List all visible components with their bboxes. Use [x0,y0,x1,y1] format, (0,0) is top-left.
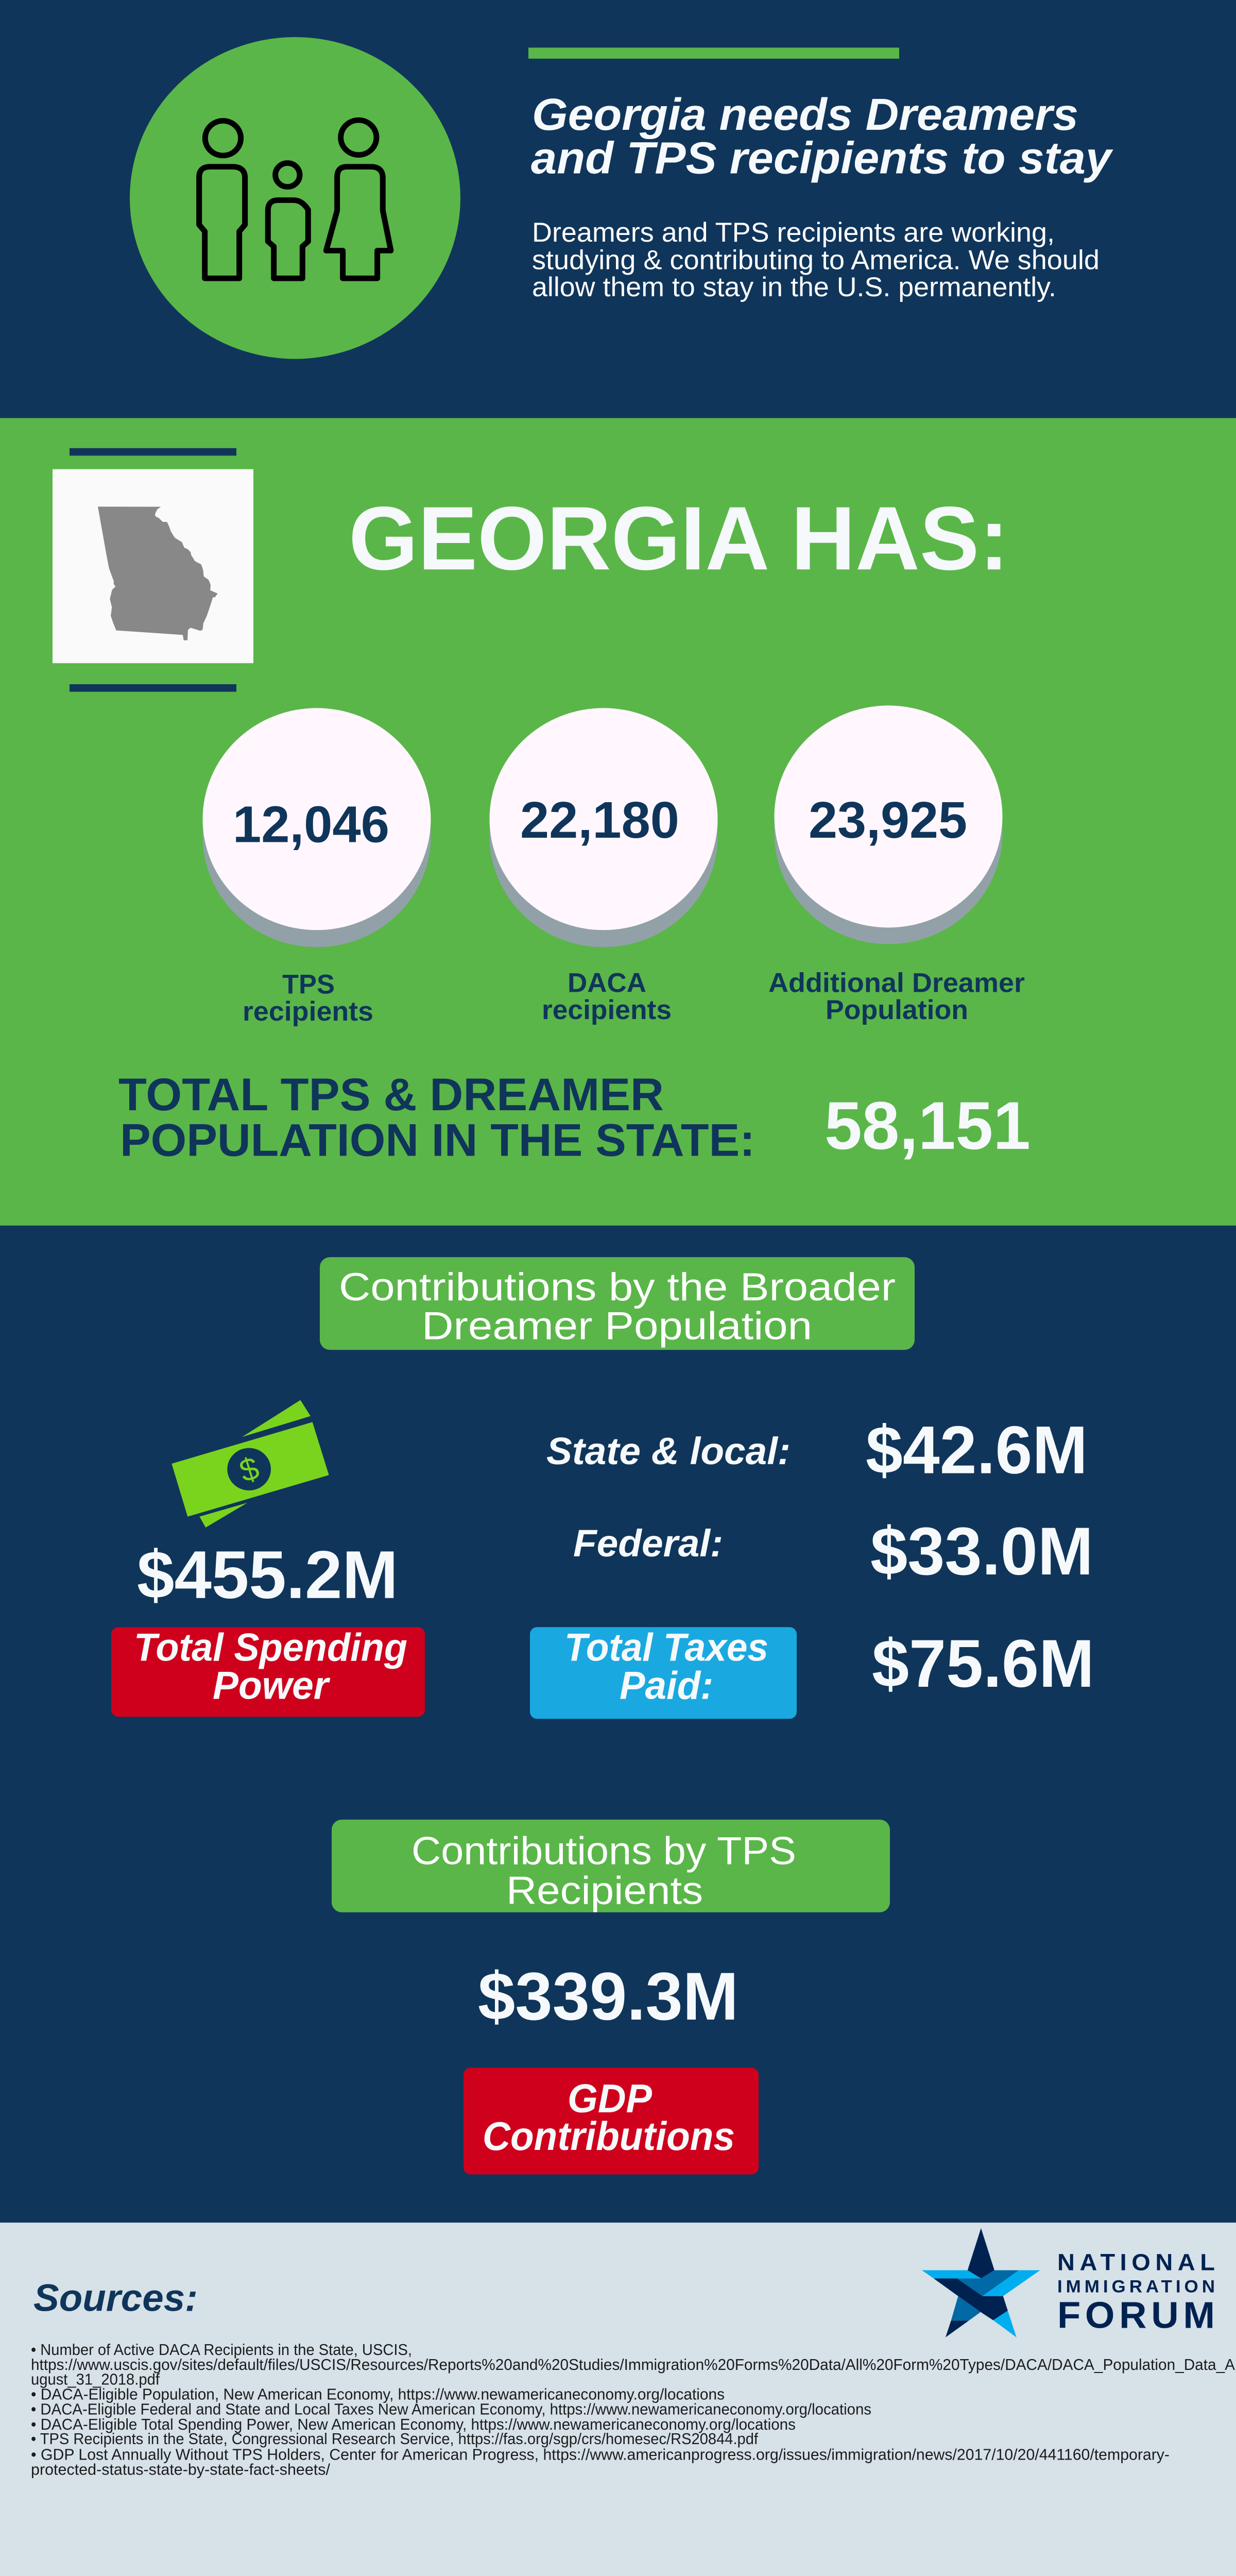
stat: TPS recipients [203,708,431,1027]
title: and TPS recipients to stay [531,133,1114,183]
stat: total taxes paid: Paid: [620,1664,713,1707]
panel: contributions [0,1226,1236,2223]
stat: federal taxes [573,1514,1093,1589]
heading: broader Dreamer population [320,1257,915,1350]
callout: GDP contributions: Contributions [483,2114,735,2159]
source list: protected-status-state-by-state-fact-sheets/ [31,2461,330,2478]
panel: Georgia has [0,418,1236,1226]
logo: National Immigration Forum [922,2228,1215,2337]
stat: TPS recipients: TPS [282,970,335,999]
callout: GDP contributions: GDP [568,2076,652,2121]
stat: spending power: Power [213,1664,331,1707]
stat: spending power [111,1537,425,1717]
callout: GDP contributions [464,2067,759,2175]
stat: DACA recipients: 22,180 [520,791,679,849]
logo: National Immigration Forum: NATIONAL [1057,2249,1215,2275]
heading: Georgia has: GEORGIA HAS: [349,487,1009,589]
title [531,89,1114,183]
heading: broader Dreamer population: Dreamer Population [422,1304,812,1348]
heading: TPS recipients: Contributions by TPS [411,1829,796,1873]
stat: GDP contributions value: $339.3M [478,1959,739,2035]
logo: National Immigration Forum: FORUM [1057,2295,1215,2336]
intro text: Dreamers and TPS recipients are working, [532,218,1055,248]
logo: National Immigration Forum: IMMIGRATION [1057,2277,1215,2296]
stat: TPS recipients: recipients [243,997,373,1027]
stat: additional Dreamer population: Additional Dreamer [768,968,1025,998]
stat: DACA recipients: DACA [568,968,646,998]
panel: sources [0,2223,1236,2576]
heading: sources: Sources: [33,2276,198,2319]
source list: • DACA-Eligible Population, New American Economy, https://www.newamericaneconomy.org/locations [31,2386,725,2403]
heading: broader Dreamer population: Contributions by the Broader [339,1265,896,1309]
stat: state and local taxes: $42.6M [866,1412,1088,1488]
stat: DACA recipients: recipients [542,995,672,1025]
stat: federal taxes: Federal: [573,1522,723,1565]
title: Georgia needs Dreamers [532,89,1078,140]
total number: 58,151 [825,1088,1031,1164]
intro text: studying & contributing to America. We should [532,245,1100,275]
stat: spending power: $455.2M [137,1537,398,1613]
source list: • Number of Active DACA Recipients in the State, USCIS, [31,2341,412,2359]
panel: header [0,0,1236,418]
source list: • DACA-Eligible Federal and State and Local Taxes New American Economy, https://www.newamericaneconomy.org/locations [31,2401,871,2418]
total label [118,1069,755,1166]
intro text [532,218,1100,302]
stat: total taxes paid [530,1625,1094,1719]
total label: POPULATION IN THE STATE: [120,1115,755,1166]
accent bar [528,47,899,59]
source list: • DACA-Eligible Total Spending Power, New American Economy, https://www.newamericaneconomy.org/locations [31,2416,796,2433]
stat: additional Dreamer population [768,705,1025,1025]
heading: TPS recipients [332,1820,890,1912]
stat: additional Dreamer population: 23,925 [809,791,967,849]
intro text: allow them to stay in the U.S. permanently. [532,273,1056,302]
source list: • TPS Recipients in the State, Congressional Research Service, https://fas.org/sgp/crs/homesec/RS20844.pdf [31,2430,758,2448]
source list [31,2341,1235,2478]
stat: total taxes paid: $75.6M [872,1626,1094,1702]
stat: state and local taxes: State & local: [546,1430,791,1472]
stat: additional Dreamer population: Population [826,995,968,1025]
stat: federal taxes: $33.0M [870,1514,1093,1589]
icon: Georgia map card [53,448,253,692]
source list: ugust_31_2018.pdf [31,2371,160,2388]
stat: DACA recipients [489,708,718,1025]
stat: TPS recipients: 12,046 [233,795,389,853]
icon: family in green circle [130,37,460,359]
stat: total taxes paid: Total Taxes [564,1625,768,1669]
icon: money [171,1400,329,1528]
heading: TPS recipients: Recipients [506,1869,703,1912]
stat: state and local taxes [546,1412,1088,1488]
total label: TOTAL TPS & DREAMER [118,1069,664,1121]
source list: • GDP Lost Annually Without TPS Holders, Center for American Progress, https://www.americanprogress.org/issues/immigration/news/2017/10/20/441160/temporary- [31,2446,1170,2463]
icon: money: $ [235,1450,263,1489]
stat: spending power: Total Spending [134,1625,407,1669]
